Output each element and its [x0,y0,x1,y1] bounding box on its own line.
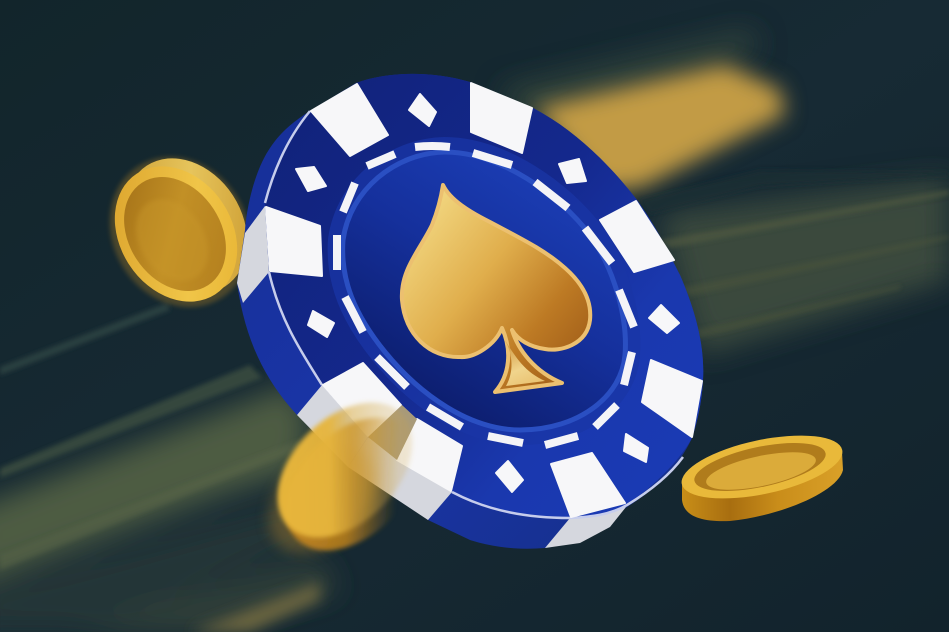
chip inner dashes [337,146,634,445]
spade [402,185,590,392]
motion streaks: lower left [0,303,340,632]
coin: right [676,424,848,521]
chip face tabs [266,83,702,517]
chip inner disc [343,152,625,430]
coin: left [82,130,278,334]
chip diamonds [296,94,679,492]
chip side silhouette [237,74,703,549]
gold blur patch top right [535,64,785,190]
chip side tabs [237,206,626,548]
coin: blurred bottom [248,377,444,576]
chip [237,74,703,549]
tab gap under blurred coin [368,405,417,460]
chip dash band [343,152,625,430]
chip rim line [265,111,683,518]
chip face [265,74,703,518]
motion streaks: upper and right [500,30,949,355]
